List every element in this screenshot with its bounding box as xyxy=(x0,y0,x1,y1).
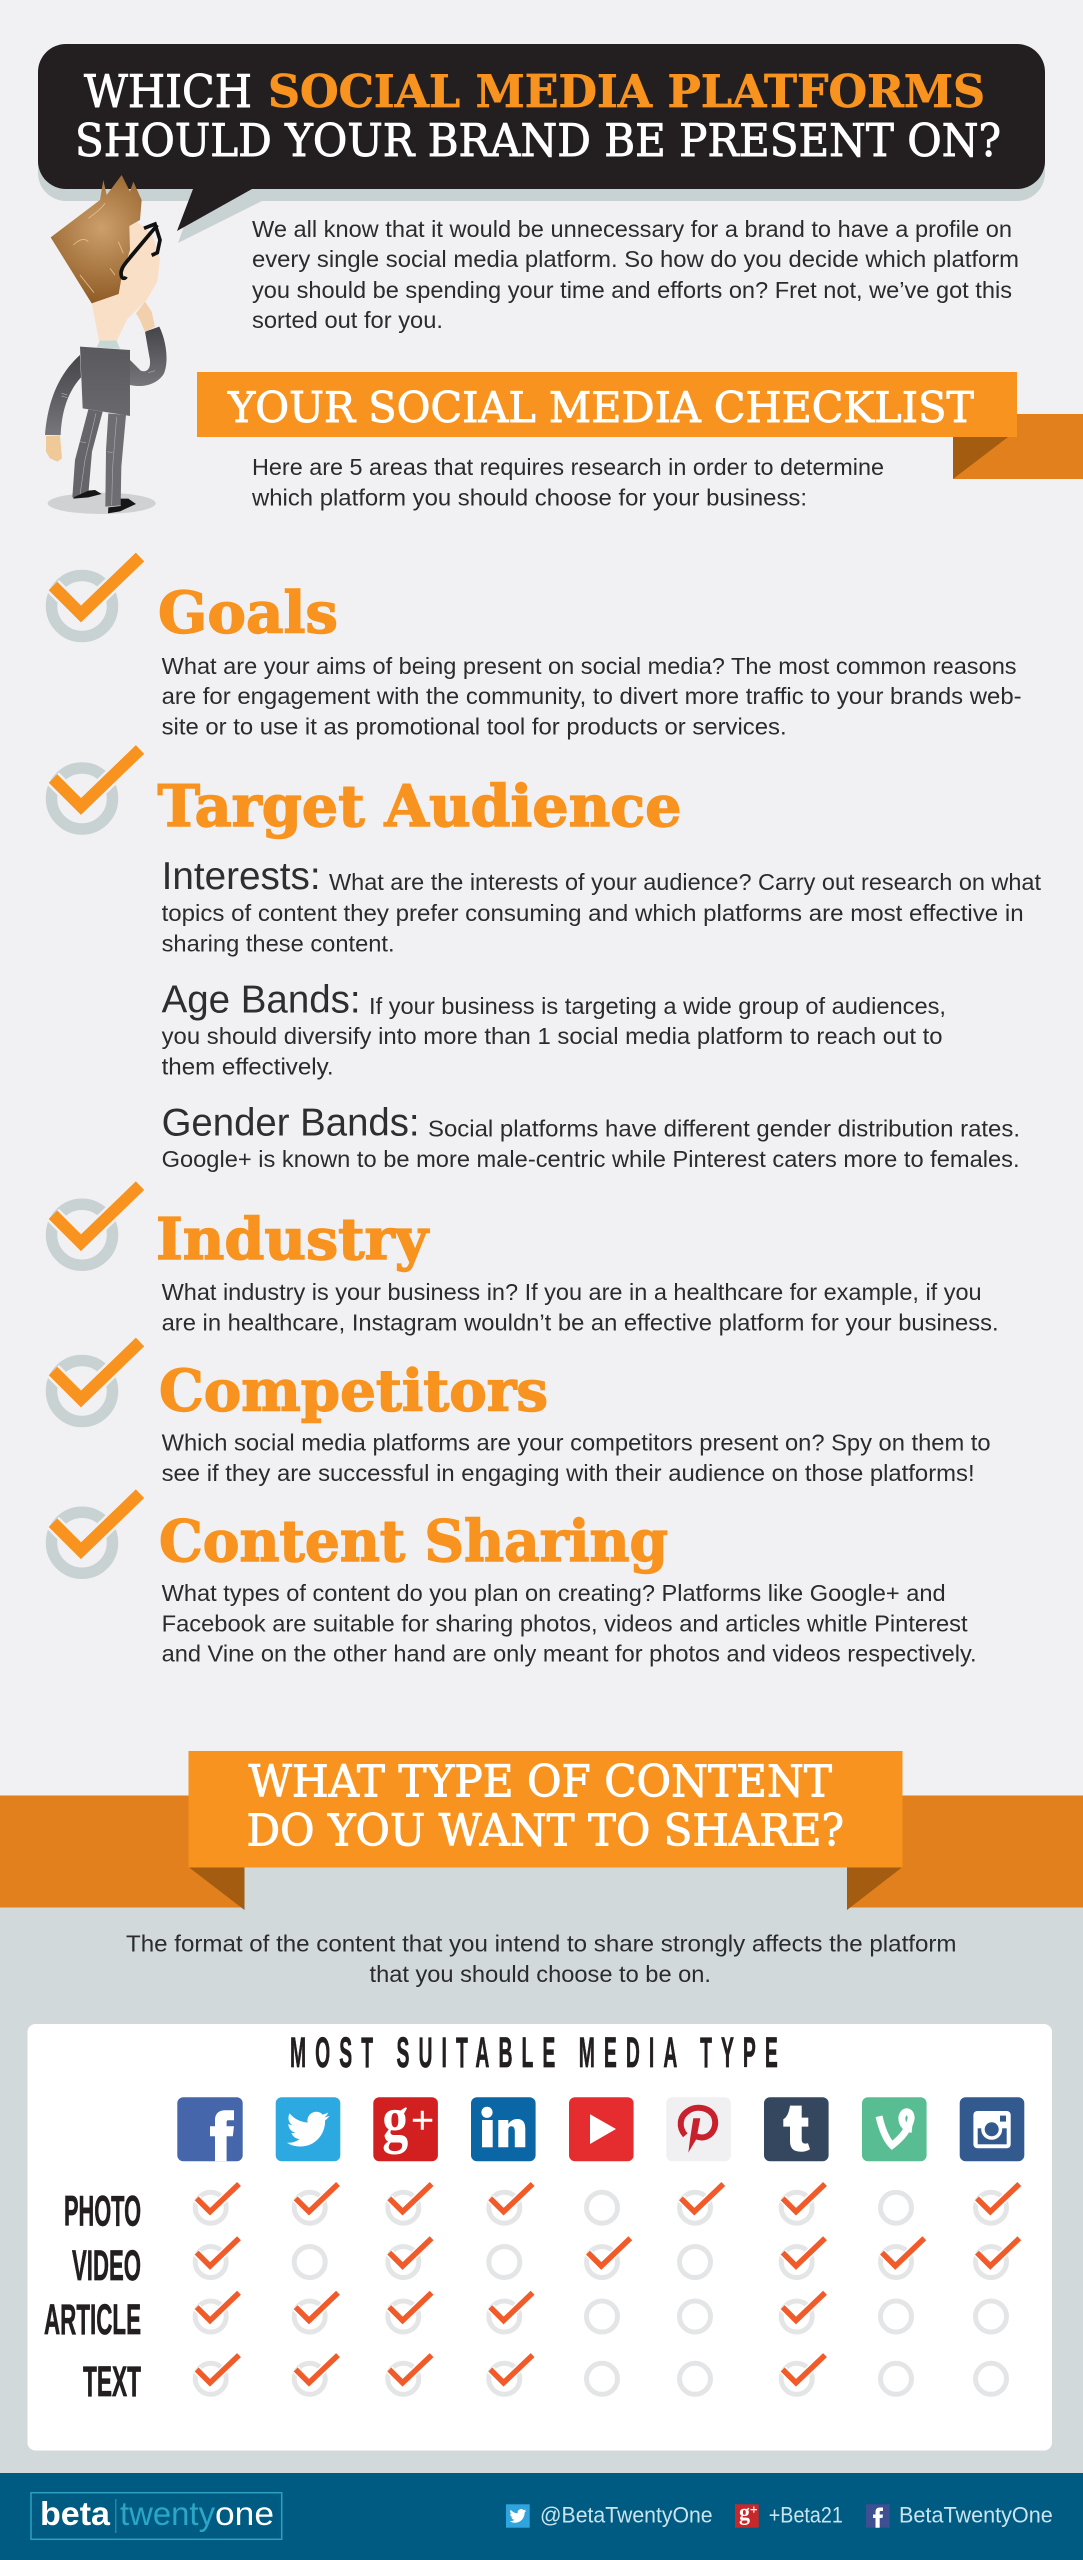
industry text xyxy=(162,1279,999,1336)
heading: competitors: Competitors xyxy=(159,1358,548,1424)
gender bands text xyxy=(162,1102,1020,1172)
competitors text: Which social media platforms are your competitors present on? Spy on them to xyxy=(162,1430,991,1456)
icon: google plus xyxy=(373,2083,438,2161)
format paragraph: that you should choose to be on. xyxy=(370,1961,711,1987)
ribbon: what type of content xyxy=(0,1751,1083,1910)
intro paragraph: We all know that it would be unnecessary for a brand to have a profile on xyxy=(252,216,1012,242)
icon: linkedin xyxy=(471,2097,536,2161)
icon: google plus: g xyxy=(382,2083,408,2155)
content sharing text: What types of content do you plan on creating? Platforms like Google+ and xyxy=(162,1580,946,1606)
intro paragraph xyxy=(252,216,1019,333)
title line 2: SHOULD YOUR BRAND BE PRESENT ON? xyxy=(75,114,1001,167)
icon: check xyxy=(52,1186,140,1265)
competitors text: see if they are successful in engaging with their audience on those platforms! xyxy=(162,1460,975,1486)
intro paragraph: every single social media platform. So how do you decide which platform xyxy=(252,246,1019,272)
ribbon: your social media checklist xyxy=(197,372,1083,479)
title line 1: SOCIAL MEDIA PLATFORMS xyxy=(268,65,985,118)
goals text: site or to use it as promotional tool for products or services. xyxy=(162,714,787,740)
social: twitter handle: @BetaTwentyOne xyxy=(540,2503,713,2528)
content sharing text xyxy=(162,1580,977,1666)
age bands text xyxy=(162,978,946,1080)
logo: beta twentyone xyxy=(31,2493,282,2539)
age bands text: If your business is targeting a wide group of audiences, xyxy=(369,993,946,1019)
footer bar xyxy=(0,2473,1083,2560)
icon: vine xyxy=(862,2097,927,2161)
section: industry xyxy=(52,1186,999,1336)
icon: twitter xyxy=(276,2097,340,2161)
section: target audience xyxy=(52,750,1041,1172)
age bands text: them effectively. xyxy=(162,1054,334,1080)
icon: youtube xyxy=(569,2097,634,2161)
logo: beta twentyone: one xyxy=(215,2495,274,2532)
checklist intro text xyxy=(251,454,884,510)
intro paragraph: you should be spending your time and efforts on? Fret not, we’ve got this xyxy=(252,277,1012,303)
row: video xyxy=(72,2238,1019,2290)
row: text: TEXT xyxy=(83,2358,141,2406)
social: google plus handle xyxy=(735,2500,843,2528)
content sharing text: Facebook are suitable for sharing photos, videos and articles whitle Pinterest xyxy=(162,1610,968,1636)
table heading: MOST SUITABLE MEDIA TYPE xyxy=(290,2030,778,2077)
age bands text: Age Bands: xyxy=(162,978,361,1022)
gender bands text: Social platforms have different gender distribution rates. xyxy=(428,1116,1020,1142)
panel: media type table xyxy=(28,2024,1052,2450)
title line 1: WHICH xyxy=(84,65,252,118)
heading: industry: Industry xyxy=(156,1206,430,1273)
ribbon: what type of content: WHAT TYPE OF CONTENT xyxy=(248,1756,832,1808)
gender bands text: Google+ is known to be more male-centric while Pinterest caters more to females. xyxy=(162,1146,1020,1172)
icon: check xyxy=(52,557,140,636)
social: facebook handle: BetaTwentyOne xyxy=(899,2503,1053,2528)
row: article xyxy=(44,2293,1006,2344)
row: text xyxy=(83,2355,1006,2406)
goals text: are for engagement with the community, to divert more traffic to your brands web- xyxy=(162,683,1022,709)
section: goals xyxy=(52,557,1022,740)
heading: content sharing: Content Sharing xyxy=(159,1508,668,1575)
icon: check xyxy=(52,1494,140,1573)
row: photo xyxy=(64,2184,1019,2236)
intro paragraph: sorted out for you. xyxy=(252,307,443,333)
character: thinking man with glasses xyxy=(45,175,167,514)
icon: check xyxy=(52,1342,140,1422)
icon: check xyxy=(52,750,140,829)
interests text xyxy=(162,855,1041,956)
icon: pinterest xyxy=(666,2097,731,2161)
row: photo: PHOTO xyxy=(64,2188,141,2236)
industry text: What industry is your business in? If you are in a healthcare for example, if you xyxy=(162,1279,982,1305)
heading: target audience: Target Audience xyxy=(158,773,682,840)
icon: instagram xyxy=(960,2097,1024,2161)
icon: tumblr xyxy=(764,2097,829,2161)
section: competitors xyxy=(52,1342,991,1486)
logo: beta twentyone: beta xyxy=(40,2495,111,2532)
ribbon: your social media checklist: YOUR SOCIAL MEDIA CHECKLIST xyxy=(227,384,974,433)
heading: goals: Goals xyxy=(158,580,338,646)
competitors text xyxy=(162,1430,991,1486)
row: article: ARTICLE xyxy=(44,2296,141,2344)
gender bands text: Gender Bands: xyxy=(162,1102,420,1144)
ribbon: what type of content: DO YOU WANT TO SHARE? xyxy=(246,1806,844,1856)
interests text: sharing these content. xyxy=(162,930,395,956)
goals text: What are your aims of being present on social media? The most common reasons xyxy=(162,653,1017,679)
interests text: What are the interests of your audience? Carry out research on what xyxy=(329,869,1041,895)
age bands text: you should diversify into more than 1 social media platform to reach out to xyxy=(162,1023,943,1049)
interests text: Interests: xyxy=(162,855,321,898)
row: video: VIDEO xyxy=(72,2242,141,2290)
interests text: topics of content they prefer consuming and which platforms are most effective in xyxy=(162,900,1024,926)
checklist intro text: which platform you should choose for your business: xyxy=(251,484,807,510)
speech bubble title xyxy=(38,44,1045,243)
social: google plus handle: g xyxy=(739,2500,750,2526)
social: google plus handle: +Beta21 xyxy=(769,2503,843,2528)
industry text: are in healthcare, Instagram wouldn’t be an effective platform for your business. xyxy=(162,1310,999,1336)
section: content sharing xyxy=(52,1494,977,1666)
goals text xyxy=(162,653,1022,740)
content sharing text: and Vine on the other hand are only meant for photos and videos respectively. xyxy=(162,1640,977,1666)
lower panel background xyxy=(0,1908,1083,2474)
format paragraph xyxy=(126,1930,956,1987)
checklist intro text: Here are 5 areas that requires research in order to determine xyxy=(252,454,884,480)
logo: beta twentyone: twenty xyxy=(120,2495,215,2532)
format paragraph: The format of the content that you intend to share strongly affects the platform xyxy=(126,1930,956,1956)
icon: facebook xyxy=(177,2097,243,2161)
